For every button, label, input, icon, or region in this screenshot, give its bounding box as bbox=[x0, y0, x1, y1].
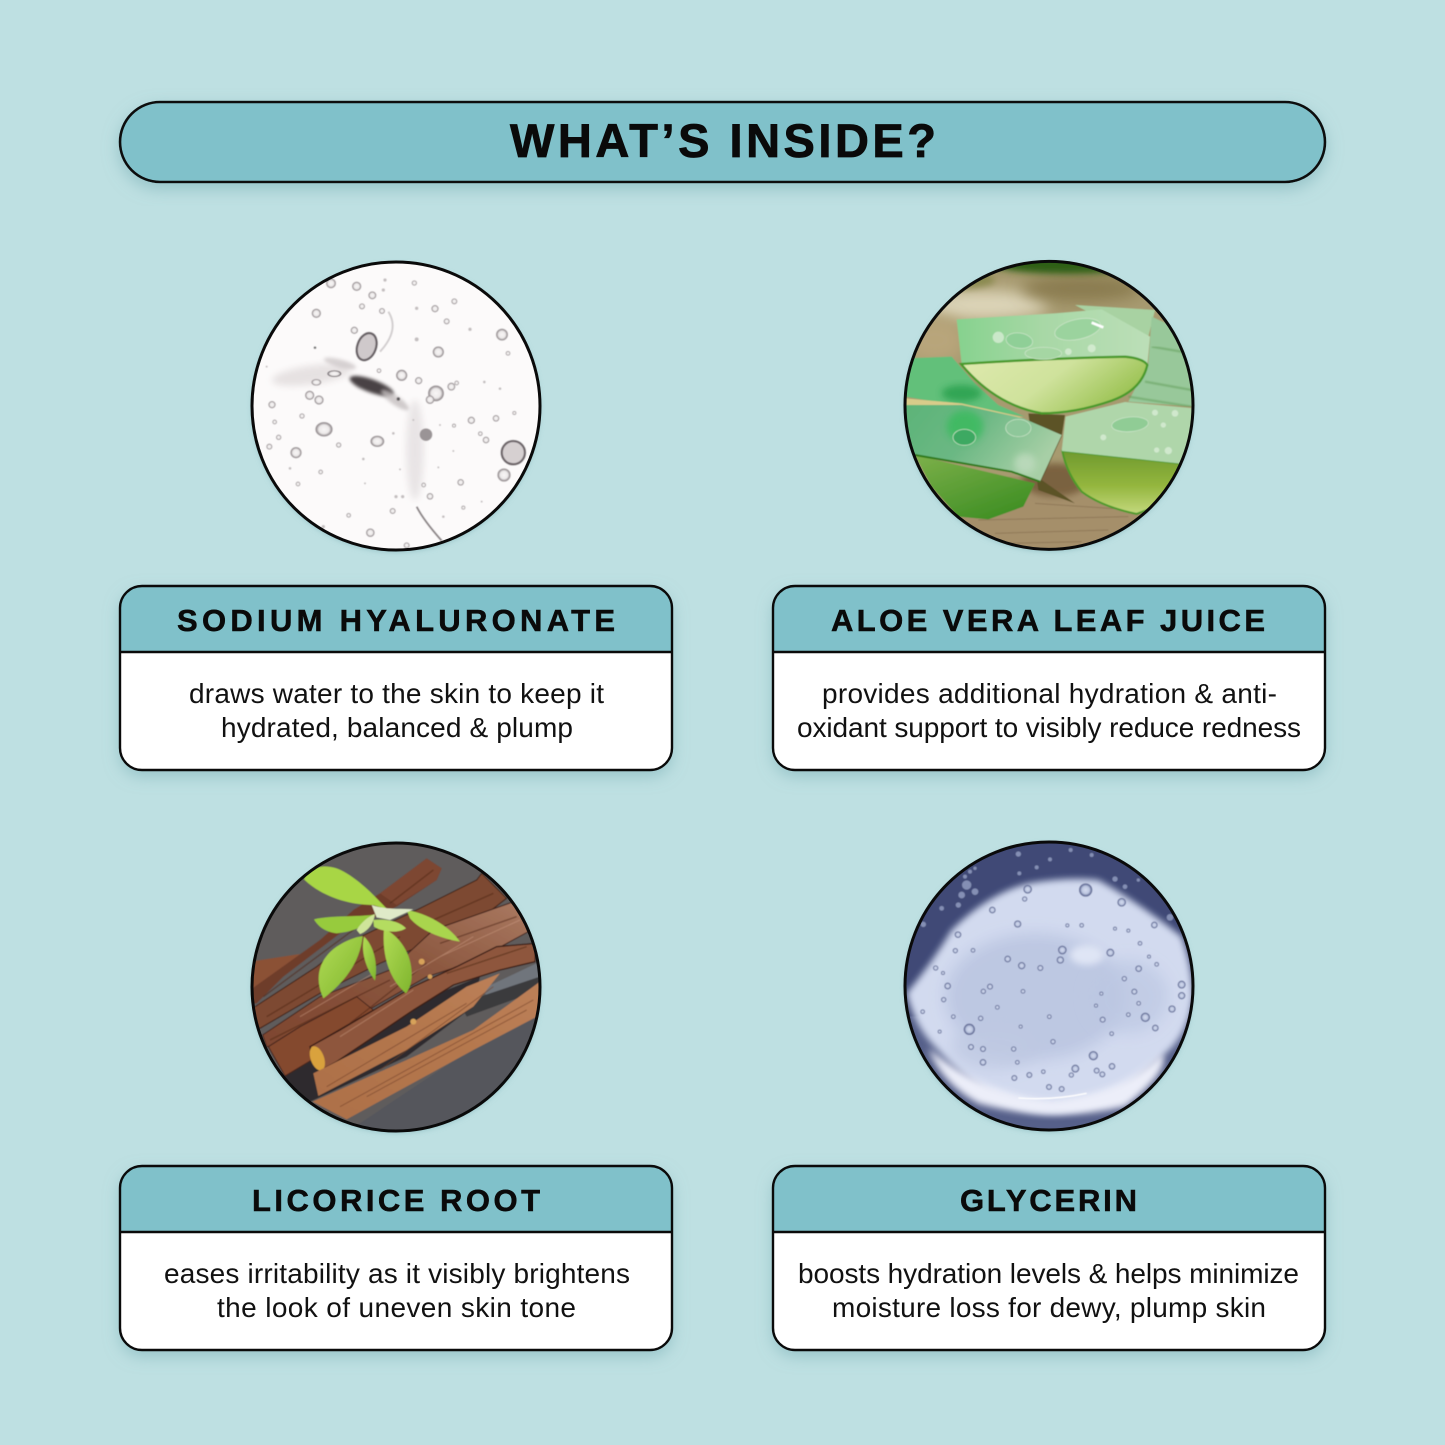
water drops bbox=[953, 315, 1149, 445]
description: provides additional hydration & anti- bbox=[822, 678, 1277, 709]
stick A bbox=[254, 884, 430, 1004]
stick E with cut end bbox=[310, 943, 536, 1071]
description: the look of uneven skin tone bbox=[217, 1292, 576, 1323]
stick B bbox=[250, 873, 507, 1028]
leaves bbox=[304, 866, 460, 998]
stick D bbox=[268, 997, 373, 1076]
stick F bbox=[313, 973, 500, 1096]
description: oxidant support to visibly reduce redness bbox=[797, 712, 1301, 743]
description: eases irritability as it visibly brightens bbox=[164, 1258, 630, 1289]
description: draws water to the skin to keep it bbox=[189, 678, 604, 709]
description bbox=[798, 1258, 1299, 1323]
card: sodium hyaluronate bbox=[120, 586, 672, 770]
photo: licorice root sticks bbox=[250, 842, 542, 1135]
left leaf flesh bbox=[915, 455, 1035, 519]
photo: sodium hyaluronate gel bbox=[250, 260, 542, 554]
description: boosts hydration levels & helps minimize bbox=[798, 1258, 1299, 1289]
title banner bbox=[120, 102, 1325, 182]
heading: ALOE VERA LEAF JUICE bbox=[831, 603, 1265, 638]
right leaf flesh bbox=[1062, 451, 1180, 514]
heading: LICORICE ROOT bbox=[252, 1183, 540, 1218]
heading: GLYCERIN bbox=[960, 1183, 1137, 1218]
top leaf skin bbox=[957, 309, 1150, 365]
photo: glycerin gel drop bbox=[903, 840, 1195, 1134]
description bbox=[797, 678, 1301, 743]
photo: aloe vera leaves bbox=[903, 260, 1195, 554]
description bbox=[189, 678, 604, 743]
card: aloe vera leaf juice bbox=[773, 586, 1325, 770]
stick C bbox=[263, 901, 528, 1050]
top leaf flesh bbox=[961, 357, 1147, 413]
description: hydrated, balanced & plump bbox=[221, 712, 573, 743]
card: glycerin bbox=[773, 1166, 1325, 1350]
wood table bbox=[962, 477, 1140, 548]
stick G bbox=[313, 982, 540, 1119]
heading: SODIUM HYALURONATE bbox=[177, 603, 615, 638]
left leaf skin bbox=[905, 405, 1062, 482]
description: moisture loss for dewy, plump skin bbox=[832, 1292, 1266, 1323]
card: licorice root bbox=[120, 1166, 672, 1350]
right leaf skin bbox=[1062, 402, 1195, 463]
description bbox=[164, 1258, 630, 1323]
title: WHAT’S INSIDE? bbox=[510, 114, 936, 167]
